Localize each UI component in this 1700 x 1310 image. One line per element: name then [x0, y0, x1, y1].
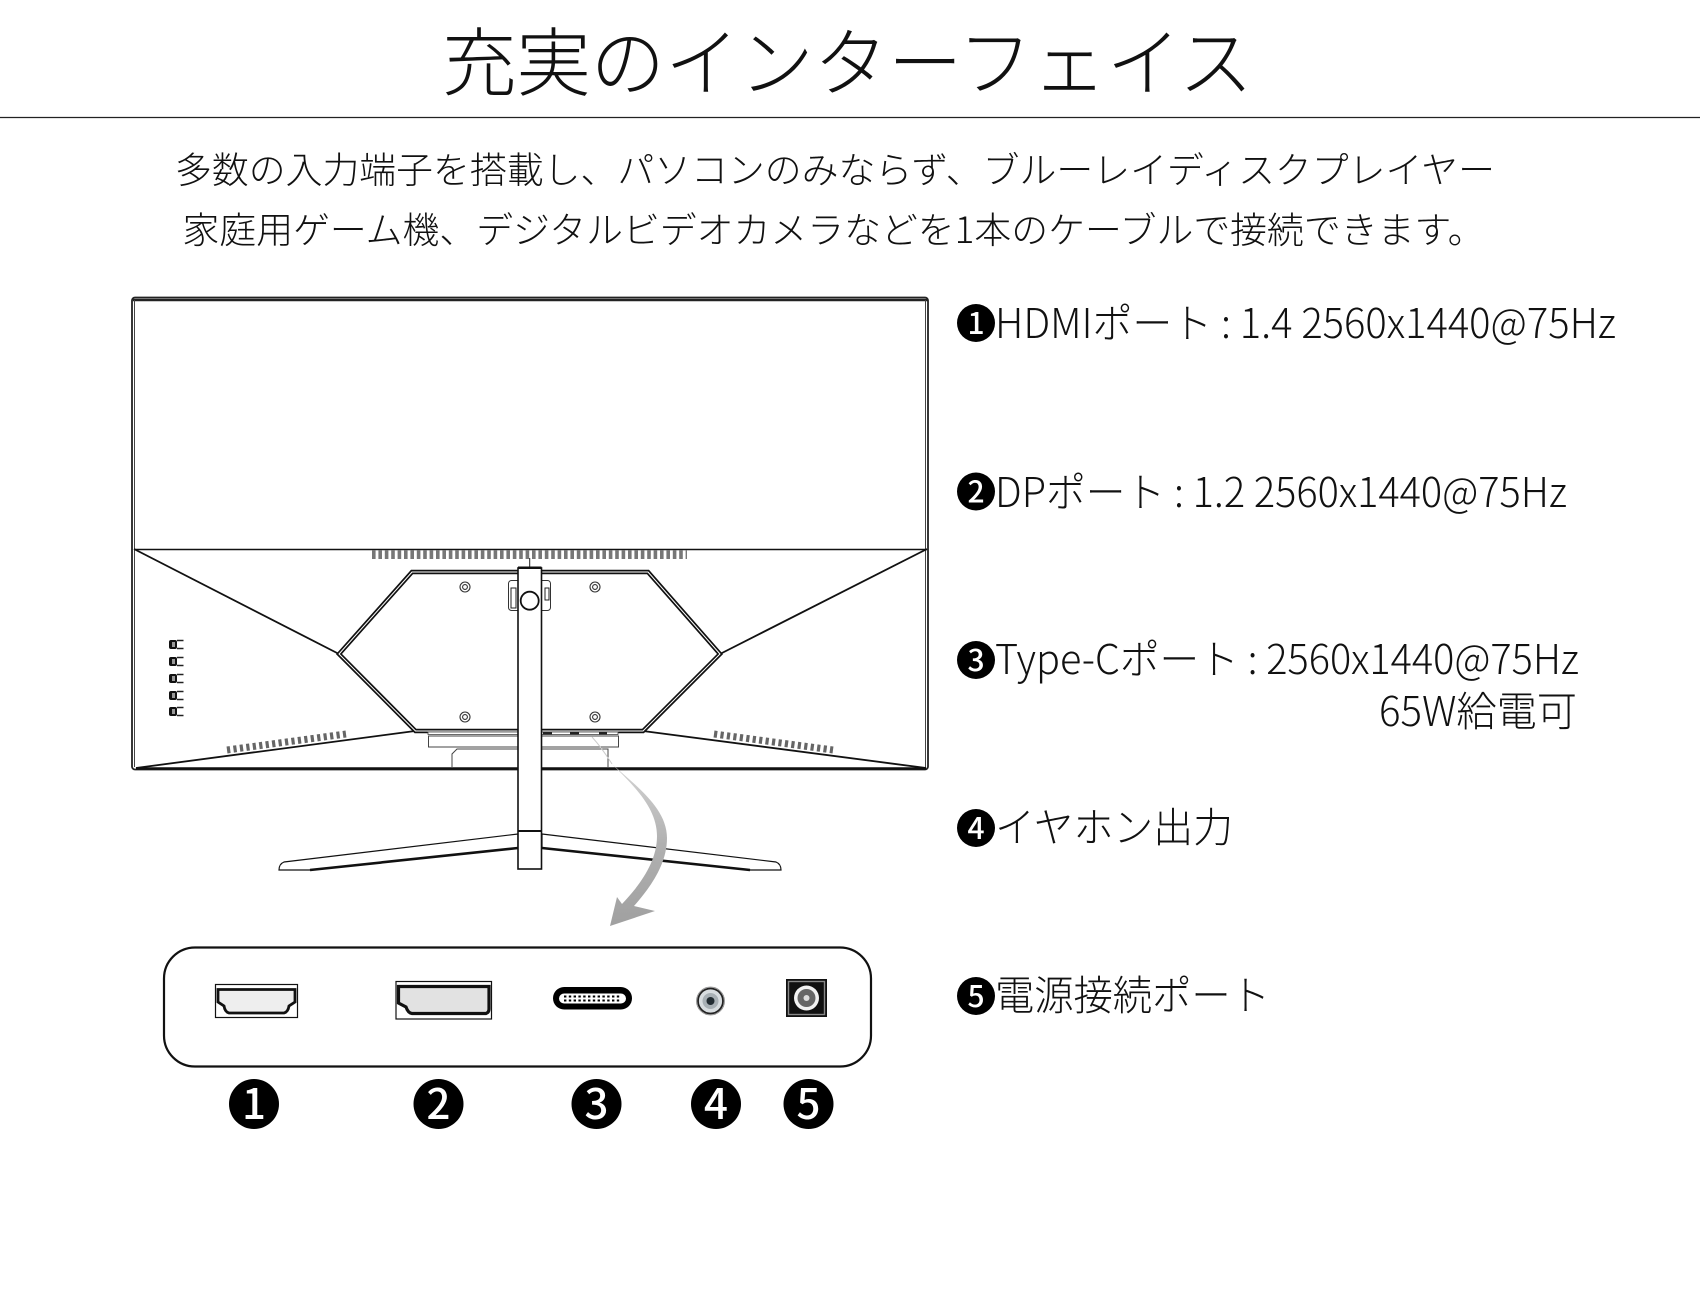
port strip and bottom cover: [428, 732, 618, 767]
rear panel creases: [134, 549, 927, 768]
intro text: 多数の入力端子を搭載し、パソコンのみならず、ブルーレイディスクプレイヤー: [175, 141, 1495, 194]
arrow: to port close-up: [610, 764, 667, 926]
spec: earphone output: 4: [967, 804, 985, 848]
spec: HDMI: 1: [967, 299, 985, 343]
bottom vent slots right: [714, 734, 833, 750]
panel: port close-up: [164, 948, 871, 1066]
spec: power connector: 電源接続ポート: [995, 962, 1270, 1022]
number markers under ports: 4: [704, 1071, 728, 1132]
icon: HDMI port: [216, 984, 298, 1018]
intro text: 家庭用ゲーム機、デジタルビデオカメラなどを1本のケーブルで接続できます。: [182, 201, 1484, 254]
spec: Type-C: 3: [967, 636, 985, 680]
monitor rear illustration: [132, 298, 928, 870]
icon: audio jack: [696, 987, 724, 1015]
spec: Type-C: [957, 626, 1579, 738]
icon: power jack: [786, 979, 827, 1017]
icon: DisplayPort: [396, 982, 492, 1019]
number markers under ports: [229, 1071, 834, 1132]
spec: earphone output: イヤホン出力: [995, 794, 1233, 854]
arrow thin start: [592, 737, 612, 764]
spec: Type-C: Type-Cポート : 2560x1440@75Hz: [995, 626, 1579, 686]
number markers under ports: 5: [797, 1071, 820, 1132]
number markers under ports: 3: [585, 1071, 608, 1132]
monitor body outline: [132, 298, 928, 770]
spec: DisplayPort: 2: [967, 468, 985, 512]
title: 充実のインターフェイス: [442, 3, 1253, 112]
spec: DisplayPort: DPポート : 1.2 2560x1440@75Hz: [995, 459, 1567, 519]
VESA screws: [460, 582, 600, 722]
spec: power connector: 5: [967, 972, 985, 1016]
spec: Type-C: 65W給電可: [1379, 678, 1577, 738]
stand neck: [518, 566, 542, 869]
intro text: [175, 141, 1495, 254]
top vent slots: [372, 550, 687, 559]
number markers under ports: 1: [242, 1071, 266, 1132]
side button icons: [169, 640, 184, 716]
stand feet: [279, 834, 781, 870]
spec: HDMI: HDMIポート : 1.4 2560x1440@75Hz: [995, 290, 1616, 350]
stand bracket: [508, 558, 550, 610]
icon: USB Type-C port: [553, 987, 632, 1010]
bottom vent slots left: [227, 734, 346, 750]
number markers under ports: 2: [427, 1071, 450, 1132]
